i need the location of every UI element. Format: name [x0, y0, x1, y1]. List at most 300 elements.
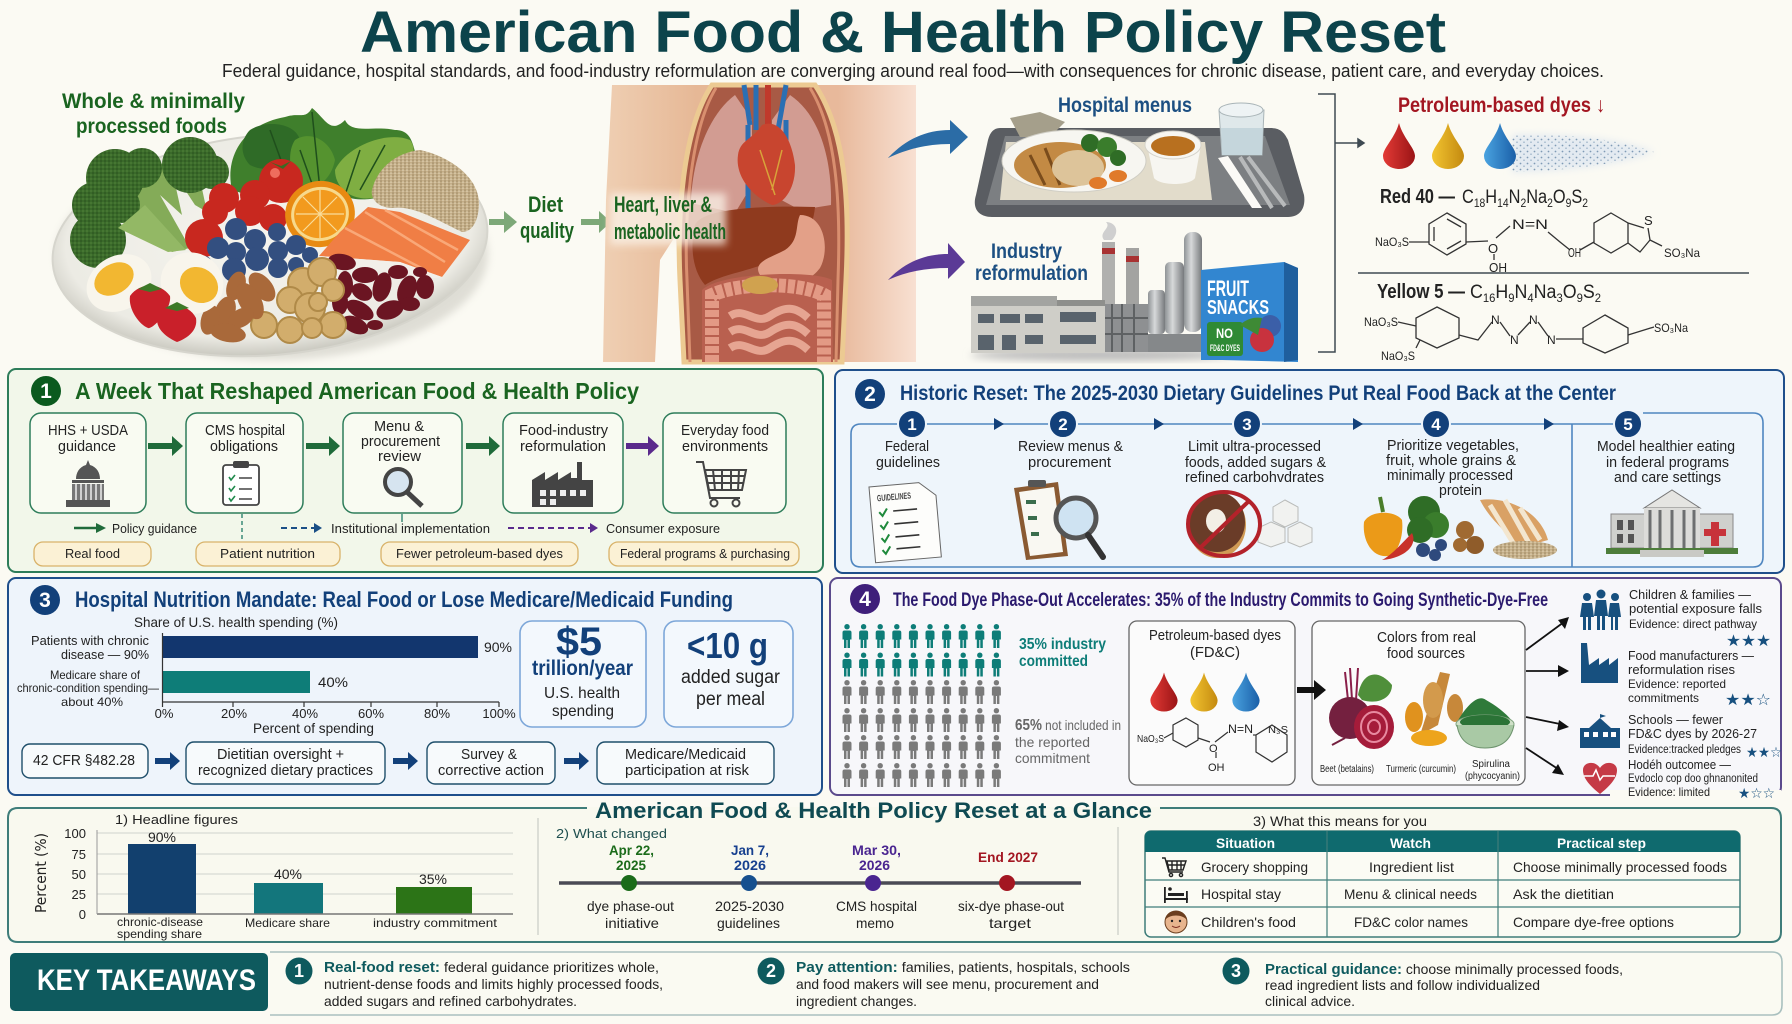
step: CMS hospital obligations: obligations [210, 438, 278, 455]
stat card: $5 trillion: spending [552, 703, 614, 720]
chemical: Yellow 5: N [1547, 333, 1556, 347]
chemical: Red 40: SO₃Na [1664, 246, 1700, 260]
chemical: Yellow 5: 4 [1527, 291, 1534, 305]
step 5: model healthier eating [1597, 410, 1738, 557]
panel 4: food dye phase-out [830, 578, 1782, 802]
column chart: headline figures: chronic-disease [117, 915, 203, 929]
heading: whole foods [62, 90, 245, 138]
icon: capitol [66, 460, 110, 507]
enforcement flow: Survey & [461, 746, 517, 763]
takeaway 3: read ingredient lists and follow individualized [1265, 977, 1540, 993]
icon: child face [1165, 911, 1187, 933]
legend: Consumer exposure [606, 521, 720, 536]
salmon [319, 207, 470, 280]
bar chart: share of spending: 0% [155, 706, 174, 721]
walnuts [251, 258, 346, 343]
step 2: review menus: procurement [1028, 455, 1111, 471]
arrow: blue curved to hospital [888, 120, 968, 158]
timeline: what changed: initiative [605, 915, 659, 931]
impact: food manufacturers: ★★☆ [1725, 690, 1771, 709]
stat card: $5 trillion: trillion/year [532, 657, 633, 680]
table: what this means for you: Hospital stay [1201, 886, 1281, 902]
step 1: federal guidelines: 1 [907, 415, 917, 434]
chemical: Red 40: Na [1526, 187, 1547, 208]
heading: petroleum-based dyes: Petroleum-based dyes ↓ [1398, 94, 1605, 117]
column chart: headline figures [32, 812, 513, 941]
chemical: Red 40: 2 [1547, 196, 1553, 210]
heading: whole foods: Whole & minimally [62, 90, 245, 113]
step: everyday food environments: environments [682, 438, 768, 455]
legend: Institutional implementation [331, 521, 490, 536]
icon: three dye drops [1383, 123, 1516, 169]
step 4: prioritize vegetables: minimally processed [1387, 468, 1513, 484]
step: menu and procurement review: procurement [361, 433, 441, 450]
label: 65 percent: the reported [1015, 734, 1090, 750]
chemical: Yellow 5 [1364, 281, 1688, 363]
impact: schools [1580, 712, 1782, 761]
icon: school [1580, 712, 1620, 748]
chemical: Red 40: N [1509, 187, 1520, 208]
icon: guidelines document [869, 481, 941, 563]
chemical: Yellow 5: O [1563, 282, 1577, 303]
impact: food manufacturers: commitments [1628, 691, 1699, 705]
label: 35 percent: committed [1019, 653, 1088, 670]
box: colors from real food sources: Spirulina [1472, 759, 1510, 770]
table: what this means for you: Children's food [1201, 914, 1296, 930]
takeaway 3: 3 [1231, 961, 1241, 981]
takeaway 2: Pay attention: families, patients, hospitals, schools [796, 959, 1130, 976]
timeline: what changed: 2) What changed [556, 826, 667, 841]
key takeaways label [10, 953, 268, 1011]
box: petroleum-based dyes: O [1209, 743, 1218, 755]
timeline: what changed: 2025 [616, 857, 646, 873]
step: everyday food environments: Everyday food [681, 422, 769, 439]
icon: heart [1583, 763, 1617, 794]
step: CMS hospital obligations: CMS hospital [205, 422, 285, 439]
icon: clipboard [223, 461, 259, 505]
takeaway 1: 1 [294, 961, 304, 981]
chemical: Yellow 5: NaO₃S [1364, 315, 1398, 329]
step 4: prioritize vegetables: protein [1439, 483, 1482, 499]
step track [851, 413, 1763, 567]
column chart: headline figures: 1) Headline figures [115, 812, 239, 827]
takeaway 2 [758, 958, 1130, 1009]
heading 4: The Food Dye Phase-Out Accelerates: 35% of the Industry Commits to Going Synthetic-Dye-Free [893, 590, 1548, 611]
panel: at a glance [8, 798, 1781, 942]
outcome pills [34, 542, 799, 566]
table: what this means for you: Ask the dietitian [1513, 886, 1614, 902]
chemical: Yellow 5: 9 [1577, 291, 1583, 305]
stomach [758, 215, 825, 283]
step: menu and procurement review [343, 413, 462, 513]
column chart: headline figures: 90% [148, 829, 176, 845]
takeaway 2: and food makers will see menu, procurement and [796, 976, 1099, 992]
column chart: headline figures: 75 [72, 847, 86, 862]
arrow: dyes to real food colors [1297, 680, 1326, 700]
chemical: Red 40: Red 40 — [1380, 186, 1455, 208]
icon: factory [532, 462, 593, 507]
impact: schools: Schools — fewer [1628, 712, 1724, 727]
outcome pills: Patient nutrition [220, 546, 315, 561]
impact: health outcomes [1583, 757, 1781, 802]
badge 2: 2 [864, 383, 876, 406]
chemical: Red 40: H [1485, 187, 1497, 208]
timeline: what changed: six-dye phase-out [958, 898, 1064, 914]
step: CMS hospital obligations [186, 413, 303, 513]
step 2: review menus: 2 [1058, 415, 1068, 434]
enforcement flow [22, 742, 774, 784]
chemical: Red 40 [1375, 186, 1700, 275]
heart [738, 124, 795, 205]
column chart: headline figures: 35% [419, 871, 447, 887]
illustration: fruit snacks box: FD&C DYES [1210, 343, 1240, 353]
impact: health outcomes: Hodéh outcomee — [1628, 757, 1731, 772]
heading: industry reformulation: Industry [991, 240, 1062, 263]
bar chart: share of spending: 20% [221, 706, 247, 721]
icon: turmeric [1405, 672, 1463, 746]
bar chart: share of spending [17, 614, 516, 736]
bar chart: share of spending: disease — 90% [61, 647, 149, 662]
intestines [702, 274, 833, 362]
chemical: Red 40: 14 [1497, 196, 1509, 210]
bar chart: share of spending: 40% [292, 706, 318, 721]
step: everyday food environments [663, 413, 786, 513]
bar chart: share of spending: 80% [424, 706, 450, 721]
column chart: headline figures: 0 [79, 907, 86, 922]
impact: children and families [1580, 587, 1771, 650]
step: HHS + USDA guidance: HHS + USDA [48, 422, 128, 439]
outcome pills: Federal programs & purchasing [620, 546, 790, 561]
chemical: Yellow 5: H [1495, 282, 1508, 303]
bar chart: share of spending: Share of U.S. health spending (%) [134, 614, 338, 630]
label: 65 percent: commitment [1015, 750, 1090, 766]
box: colors from real food sources: Beet (betalains) [1320, 764, 1374, 775]
kidney beans [327, 252, 434, 338]
impact: food manufacturers [1581, 643, 1771, 709]
step: menu and procurement review: review [378, 448, 421, 465]
timeline: what changed: 2025-2030 [715, 898, 784, 914]
step: HHS + USDA guidance: guidance [58, 438, 116, 455]
panel 2: historic reset [835, 370, 1784, 573]
timeline: what changed: Mar 30, [852, 842, 901, 858]
icon: clipboard with magnifier [1014, 480, 1103, 560]
chemical: Yellow 5: NaO₃S [1381, 349, 1415, 363]
panel 1: a week that reshaped policy [8, 369, 823, 572]
chemical: Yellow 5: SO₃Na [1654, 321, 1688, 335]
step 1: federal guidelines: Federal [885, 439, 929, 455]
label: diet quality: Diet [528, 192, 564, 217]
timeline: what changed: dye phase-out [587, 898, 674, 914]
chemical: Yellow 5: 3 [1556, 291, 1563, 305]
box: colors from real food sources: Turmeric (curcumin) [1386, 764, 1456, 775]
box: petroleum-based dyes: NaO₃S [1137, 733, 1164, 745]
timeline: what changed: CMS hospital [836, 898, 917, 914]
timeline: what changed: guidelines [717, 915, 780, 931]
vessels [744, 85, 786, 130]
legend: Policy guidance [112, 521, 197, 536]
heading 2: Historic Reset: The 2025-2030 Dietary Guidelines Put Real Food Back at the Center [900, 382, 1616, 405]
chemical: Red 40: 18 [1474, 196, 1486, 210]
bar chart: share of spending: 90% [484, 639, 512, 655]
box: petroleum-based dyes: OH [1208, 762, 1225, 774]
chemical: Red 40: O [1553, 187, 1566, 208]
heading: at a glance: American Food & Health Policy Reset at a Glance [595, 798, 1152, 823]
icon: factory [1581, 643, 1618, 683]
impact: children and families: Children & families — [1629, 587, 1751, 602]
chemical: Red 40: N=N [1512, 216, 1548, 232]
enforcement flow: corrective action [438, 762, 544, 779]
chemical: Red 40: 2 [1582, 196, 1588, 210]
table: what this means for you: Situation [1216, 835, 1275, 851]
chemical: Red 40: S [1644, 213, 1653, 228]
impact: health outcomes: Evdoclo cop doo ghnanonited [1628, 773, 1758, 785]
icon: guidelines document: GUIDELINES [877, 490, 911, 503]
box: petroleum-based dyes: N=N [1228, 724, 1253, 736]
table: what this means for you: Compare dye-free options [1513, 914, 1674, 930]
icon: donut with no sign and sugar cubes [1188, 492, 1312, 558]
label: heart liver metabolic health: metabolic health [614, 219, 726, 244]
chemical: Red 40: S [1571, 187, 1582, 208]
badge 2 [855, 379, 885, 409]
timeline: what changed: target [989, 915, 1031, 931]
heading: industry reformulation [975, 240, 1088, 285]
flow arrows [148, 436, 659, 456]
impact: children and families: potential exposure falls [1629, 601, 1762, 616]
chemical: Yellow 5: N [1510, 333, 1519, 347]
box: colors from real food sources: Colors from real [1377, 630, 1476, 646]
table: what this means for you: Practical step [1557, 835, 1646, 851]
icon: bed [1164, 887, 1188, 903]
column chart: headline figures: 40% [274, 866, 302, 882]
step 5: model healthier eating: 5 [1623, 415, 1633, 434]
step: menu and procurement review: Menu & [374, 418, 424, 435]
table: what this means for you: 3) What this means for you [1253, 813, 1427, 829]
impact arrows [1526, 617, 1569, 775]
illustration: factory [970, 222, 1230, 361]
illustration: hospital tray [975, 103, 1304, 217]
icon: federal building with cross [1606, 490, 1738, 557]
illustration: fruit snacks box: FRUIT [1207, 276, 1249, 301]
arrow: diet to organs [581, 211, 611, 233]
heading: industry reformulation: reformulation [975, 262, 1088, 285]
heading 1: A Week That Reshaped American Food & Health Policy [75, 378, 639, 404]
legend [74, 514, 720, 540]
bracket and arrow [1318, 94, 1364, 352]
takeaway 1: nutrient-dense foods and limits highly processed foods, [324, 976, 663, 992]
outcome pills: Real food [65, 546, 120, 561]
column chart: headline figures: industry commitment [373, 916, 498, 930]
illustration: fruit snacks box: NO [1216, 325, 1233, 341]
arrow: food to diet [489, 211, 517, 233]
bar chart: share of spending: 60% [358, 706, 384, 721]
title: American Food & Health Policy Reset [360, 0, 1446, 65]
takeaway 1 [286, 958, 663, 1009]
subtitle: Federal guidance, hospital standards, and food-industry reformulation are converging around real food—with consequences for chronic disease, patient care, and everyday choices. [222, 61, 1604, 81]
badge 4: 4 [859, 588, 871, 611]
box: petroleum-based dyes: Petroleum-based dyes [1149, 628, 1281, 644]
label: heart liver metabolic health [610, 192, 726, 245]
box: colors from real food sources [1312, 621, 1525, 785]
bar chart: share of spending: Percent of spending [253, 720, 374, 736]
column chart: headline figures: 25 [72, 887, 86, 902]
arrow: purple curved to industry [888, 243, 965, 280]
chemical: Red 40: 9 [1566, 196, 1572, 210]
chemical: Yellow 5: N [1515, 282, 1527, 303]
column chart: headline figures: 100 [64, 826, 86, 841]
column chart: headline figures: Percent (%) [32, 833, 50, 913]
liver [692, 207, 815, 285]
icon: spirulina bowl [1456, 698, 1514, 748]
illustration: fruit snacks box: SNACKS [1207, 297, 1269, 319]
chemical: Red 40: OH [1489, 260, 1507, 275]
takeaway 1: added sugars and refined carbohydrates. [324, 993, 577, 1009]
table: what this means for you: Choose minimally processed foods [1513, 859, 1727, 875]
table: what this means for you: Grocery shopping [1201, 859, 1308, 875]
takeaway 2: 2 [766, 961, 776, 981]
enforcement flow: recognized dietary practices [198, 762, 373, 779]
takeaway 3: Practical guidance: choose minimally processed foods, [1265, 961, 1623, 978]
impact: food manufacturers: Evidence: reported [1628, 677, 1726, 691]
chemical: Yellow 5: Yellow 5 — [1377, 281, 1465, 303]
enforcement flow: Medicare/Medicaid [625, 746, 746, 763]
table: what this means for you: Ingredient list [1369, 859, 1454, 875]
bar chart: share of spending: 40% [318, 674, 348, 690]
column chart: headline figures: Medicare share [245, 916, 330, 930]
column chart: headline figures: 50 [72, 867, 86, 882]
impact: schools: FD&C dyes by 2026-27 [1628, 726, 1757, 741]
icon: beet [1329, 668, 1394, 749]
step 1: federal guidelines: guidelines [876, 455, 940, 471]
chemical: Yellow 5: C [1470, 282, 1484, 303]
stat card: under 10 g sugar: added sugar [681, 667, 781, 688]
step 2: review menus [1014, 410, 1123, 560]
bar chart: share of spending: Patients with chronic [31, 633, 149, 648]
stat card: under 10 g sugar: <10 g [687, 625, 768, 666]
step: food-industry reformulation: reformulation [520, 438, 606, 455]
takeaway 3: clinical advice. [1265, 993, 1355, 1009]
chemical: Yellow 5: Na [1534, 282, 1557, 303]
icon: family [1580, 590, 1621, 630]
stat card: under 10 g sugar: per meal [696, 689, 765, 710]
icon: magnifier [385, 469, 422, 506]
label: 35 percent: 35% industry [1019, 636, 1106, 653]
blueberries [199, 218, 318, 282]
step 3: limit ultra-processed [1185, 410, 1326, 558]
badge 1 [31, 376, 61, 406]
takeaway 3 [1222, 958, 1623, 1009]
label: diet quality: quality [520, 218, 575, 243]
timeline: what changed: Apr 22, [609, 842, 654, 858]
illustration: fruit snacks box [1201, 262, 1298, 362]
heading: hospital menus: Hospital menus [1058, 94, 1192, 117]
step 3: limit ultra-processed: 3 [1242, 415, 1252, 434]
column chart: headline figures: spending share [117, 927, 202, 941]
chemical: Yellow 5: 2 [1595, 291, 1601, 305]
icon: cart [1162, 858, 1186, 877]
chemical: Red 40: O [1488, 241, 1498, 256]
timeline: what changed: memo [856, 915, 894, 931]
step 4: prioritize vegetables [1364, 410, 1557, 561]
lungs [691, 95, 752, 213]
heading: whole foods: processed foods [76, 115, 227, 138]
almonds [197, 268, 281, 345]
step 4: prioritize vegetables: fruit, whole grains & [1386, 453, 1516, 469]
chemical: Yellow 5: 16 [1483, 291, 1496, 305]
step 3: limit ultra-processed: foods, added sugars & [1185, 455, 1326, 471]
impact: food manufacturers: reformulation rises [1628, 662, 1735, 677]
chemical: Yellow 5: S [1583, 282, 1595, 303]
bar chart: share of spending: about 40% [61, 695, 123, 709]
badge 3: 3 [39, 589, 51, 612]
badge 3 [30, 585, 60, 615]
bar chart: share of spending: Medicare share of [50, 668, 141, 682]
impact: schools: Evidence:tracked pledges [1628, 744, 1741, 756]
impact: children and families: Evidence: direct pathway [1629, 617, 1757, 631]
outcome pills: Fewer petroleum-based dyes [396, 546, 563, 561]
impact: health outcomes: ★☆☆ [1738, 786, 1775, 802]
chemical: Yellow 5: N [1491, 313, 1500, 327]
icon: vegetables and protein [1364, 496, 1557, 561]
chemical: Yellow 5: 9 [1508, 291, 1515, 305]
step: food-industry reformulation: Food-industry [519, 422, 608, 439]
chemical: Red 40: NaO₃S [1375, 235, 1409, 249]
divider [1358, 272, 1749, 274]
label: 65 percent [1015, 717, 1121, 766]
step: food-industry reformulation [503, 413, 623, 513]
badge 1: 1 [40, 380, 52, 403]
bar chart: share of spending: 100% [482, 706, 516, 721]
bar chart: share of spending: chronic-condition spending— [17, 681, 159, 695]
enforcement flow: Dietitian oversight + [217, 746, 344, 763]
box: petroleum-based dyes [1129, 621, 1295, 785]
box: colors from real food sources: (phycocyanin) [1465, 771, 1520, 782]
step 2: review menus: Review menus & [1018, 439, 1123, 455]
takeaway 1: Real-food reset: federal guidance prioritizes whole, [324, 959, 659, 976]
timeline: what changed: 2026 [734, 857, 766, 873]
table: what this means for you: FD&C color names [1354, 914, 1468, 930]
step 4: prioritize vegetables: Prioritize vegetables, [1387, 438, 1519, 454]
rice [372, 150, 479, 232]
hero: whole foods plate [43, 90, 497, 374]
box: petroleum-based dyes: N₃S [1268, 724, 1288, 736]
step 3: limit ultra-processed: refined carbohvdrates [1185, 470, 1324, 486]
impact: schools: ★★☆ [1746, 745, 1782, 761]
stat card: $5 trillion [520, 620, 646, 727]
chemical: Red 40: C [1462, 187, 1476, 208]
step 5: model healthier eating: in federal programs [1606, 455, 1729, 471]
timeline: what changed [556, 826, 1081, 931]
chemical: Red 40: 2 [1520, 196, 1526, 210]
step: HHS + USDA guidance [30, 413, 146, 513]
impact: children and families: ★★★ [1726, 631, 1771, 650]
key takeaways label: KEY TAKEAWAYS [37, 964, 256, 997]
label: diet quality [520, 192, 575, 243]
hero: anatomy torso [603, 85, 916, 362]
greens [230, 108, 420, 199]
label: heart liver metabolic health: Heart, liver & [614, 192, 712, 217]
chemical: Red 40: OH [1568, 245, 1581, 260]
timeline: what changed: 2026 [859, 857, 890, 873]
dye mist dissolving [1512, 135, 1654, 172]
step 5: model healthier eating: and care settings [1614, 470, 1721, 486]
timeline: what changed: End 2027 [978, 849, 1038, 865]
badge 4 [850, 584, 880, 614]
impact: health outcomes: Evidence: limited [1628, 785, 1710, 799]
key takeaways bar [10, 952, 1782, 1015]
stat card: $5 trillion: U.S. health [544, 685, 620, 702]
stat card: $5 trillion: $5 [556, 620, 602, 664]
tomatoes [185, 159, 303, 257]
